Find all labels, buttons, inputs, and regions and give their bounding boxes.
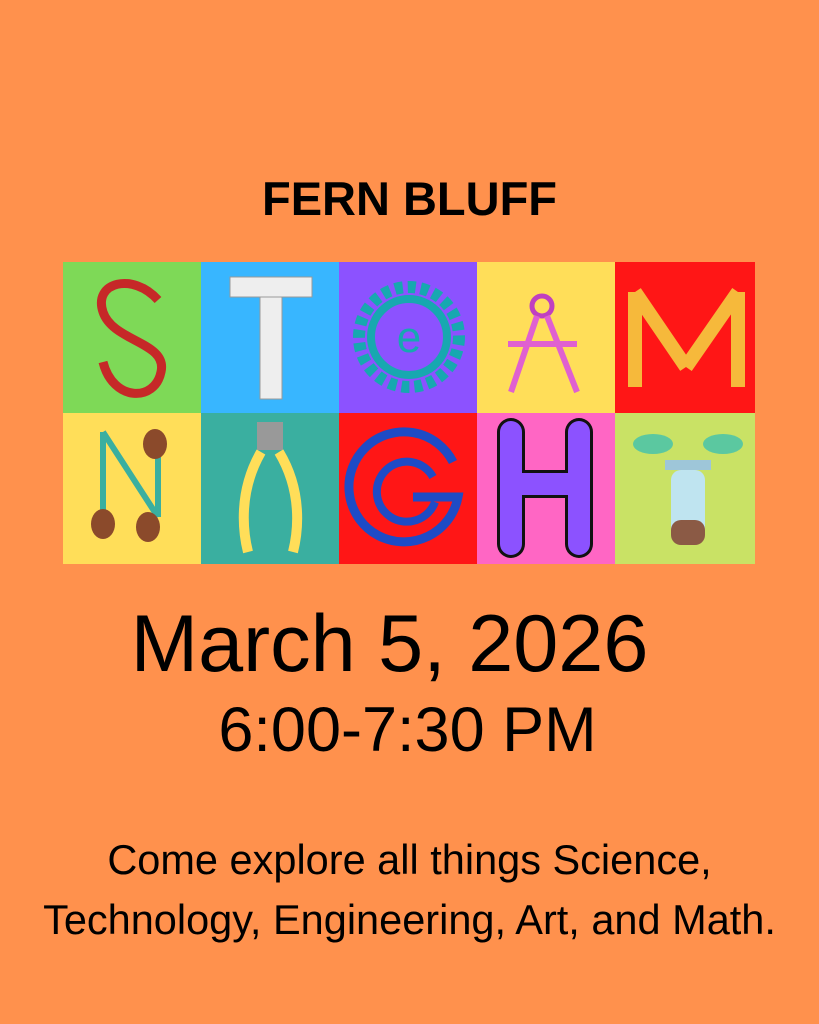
tile M pencils	[615, 262, 755, 413]
STEAM NIGHT tile grid	[63, 262, 755, 564]
description	[43, 836, 776, 943]
tile E gear	[339, 262, 477, 413]
tile E gear: e	[397, 313, 421, 362]
title: FERN BLUFF	[262, 172, 557, 225]
tile I pliers	[201, 413, 339, 564]
description: Technology, Engineering, Art, and Math.	[43, 896, 776, 943]
tile T test tube	[615, 413, 755, 564]
tile G	[339, 413, 477, 564]
tile N brushes	[63, 413, 201, 564]
time: 6:00-7:30 PM	[218, 695, 597, 765]
tile A compass	[477, 262, 615, 413]
tile H	[477, 413, 615, 564]
tile T ruler	[201, 262, 339, 413]
tile S	[63, 262, 201, 413]
date: March 5, 2026	[131, 599, 648, 689]
description: Come explore all things Science,	[107, 836, 712, 883]
